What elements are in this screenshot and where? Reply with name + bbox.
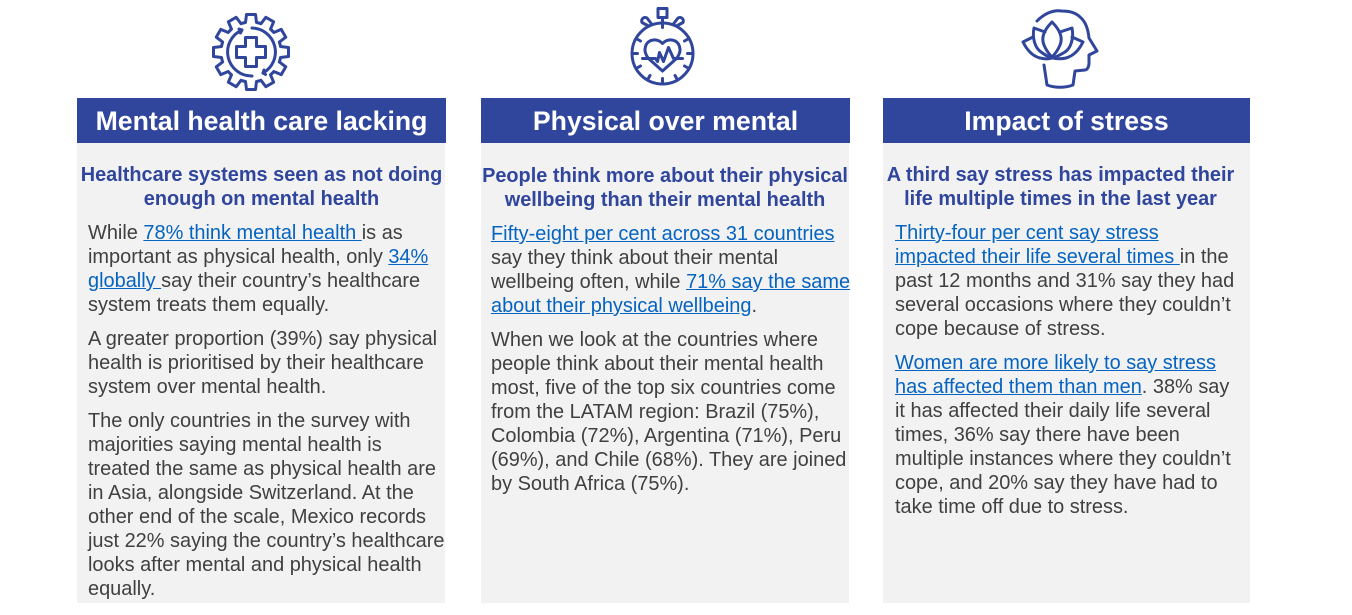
heading: impact of stress: Impact of stress (964, 106, 1169, 136)
text block: country comparison: in Asia, alongside Switzerland. At the (88, 482, 414, 504)
panel: impact of stress (883, 143, 1250, 603)
text block: country comparison: equally. (88, 578, 155, 600)
text block: women more likely: it has affected their daily life several (895, 400, 1210, 422)
heading: physical over mental: Physical over mental (533, 106, 798, 136)
text block: women more likely: has affected them than men. 38% say (895, 376, 1229, 398)
subheading: people think more about physical: People think more about their physical (482, 165, 848, 187)
text block: LATAM countries: from the LATAM region: Brazil (75%), (491, 401, 819, 423)
text block: thirty-four per cent: Thirty-four per cent say stress (895, 222, 1159, 244)
text block: fifty-eight per cent: wellbeing often, while 71% say the same (491, 271, 850, 293)
text block: mental health equality: important as physical health, only 34% (88, 246, 428, 268)
text block: mental health equality (88, 222, 428, 316)
text block: LATAM countries: people think about their mental health (491, 353, 824, 375)
text block: women more likely: Women are more likely to say stress (895, 352, 1216, 374)
text block: physical health prioritised: system over mental health. (88, 376, 326, 398)
text block: thirty-four per cent (895, 222, 1234, 340)
text block: LATAM countries: Colombia (72%), Argentina (71%), Peru (491, 425, 841, 447)
text block: women more likely: times, 36% say there have been (895, 424, 1180, 446)
panel: mental health care lacking (77, 143, 445, 603)
heading: physical over mental (481, 98, 850, 143)
subheading: healthcare systems (81, 164, 442, 210)
text block: thirty-four per cent: cope because of stress. (895, 318, 1106, 340)
text block: physical health prioritised: health is prioritised by their healthcare (88, 352, 424, 374)
text block: thirty-four per cent: several occasions where they couldn’t (895, 294, 1231, 316)
text block: mental health equality: While 78% think mental health is as (88, 222, 403, 244)
text block: fifty-eight per cent: about their physical wellbeing. (491, 295, 757, 317)
text block: physical health prioritised: A greater proportion (39%) say physical (88, 328, 437, 350)
text block: women more likely: cope, and 20% say they have had to (895, 472, 1218, 494)
subheading: a third say stress: life multiple times in the last year (904, 188, 1217, 210)
heading: impact of stress (883, 98, 1250, 143)
text block: country comparison: other end of the scale, Mexico records (88, 506, 426, 528)
text block: fifty-eight per cent: say they think about their mental (491, 247, 778, 269)
text block: women more likely: multiple instances where they couldn’t (895, 448, 1231, 470)
text block: mental health equality: system treats them equally. (88, 294, 329, 316)
text block: LATAM countries: (69%), and Chile (68%). They are joined (491, 449, 846, 471)
subheading: people think more about physical: wellbeing than their mental health (505, 189, 825, 211)
text block: mental health equality: globally say their country’s healthcare (88, 270, 420, 292)
text block: women more likely: take time off due to stress. (895, 496, 1128, 518)
text block: country comparison: The only countries in the survey with (88, 410, 410, 432)
icon: head with lotus (1021, 9, 1099, 89)
panel: physical over mental (481, 143, 849, 603)
heading: mental health care lacking: Mental health care lacking (96, 106, 427, 136)
subheading: a third say stress (887, 164, 1234, 210)
text block: country comparison (88, 410, 444, 600)
text block: fifty-eight per cent (491, 223, 850, 317)
text block: women more likely (895, 352, 1231, 518)
text block: thirty-four per cent: impacted their life several times in the (895, 246, 1229, 268)
text block: LATAM countries: most, five of the top six countries come (491, 377, 836, 399)
text block: country comparison: just 22% saying the country’s healthcare (88, 530, 444, 552)
subheading: healthcare systems: enough on mental health (144, 188, 379, 210)
subheading: a third say stress: A third say stress has impacted their (887, 164, 1234, 186)
subheading: healthcare systems: Healthcare systems seen as not doing (81, 164, 442, 186)
text block: physical health prioritised (88, 328, 437, 398)
text block: country comparison: treated the same as physical health are (88, 458, 436, 480)
icon: stopwatch with heart (630, 7, 694, 86)
subheading: people think more about physical (482, 165, 848, 211)
heading: mental health care lacking (77, 98, 446, 143)
text block: LATAM countries (491, 329, 846, 495)
text block: LATAM countries: by South Africa (75%). (491, 473, 689, 495)
icon: gear with medical cross (212, 13, 290, 91)
text block: country comparison: majorities saying mental health is (88, 434, 382, 456)
text block: fifty-eight per cent: Fifty-eight per cent across 31 countries (491, 223, 835, 245)
text block: country comparison: looks after mental and physical health (88, 554, 422, 576)
text block: thirty-four per cent: past 12 months and 31% say they had (895, 270, 1234, 292)
text block: LATAM countries: When we look at the countries where (491, 329, 818, 351)
